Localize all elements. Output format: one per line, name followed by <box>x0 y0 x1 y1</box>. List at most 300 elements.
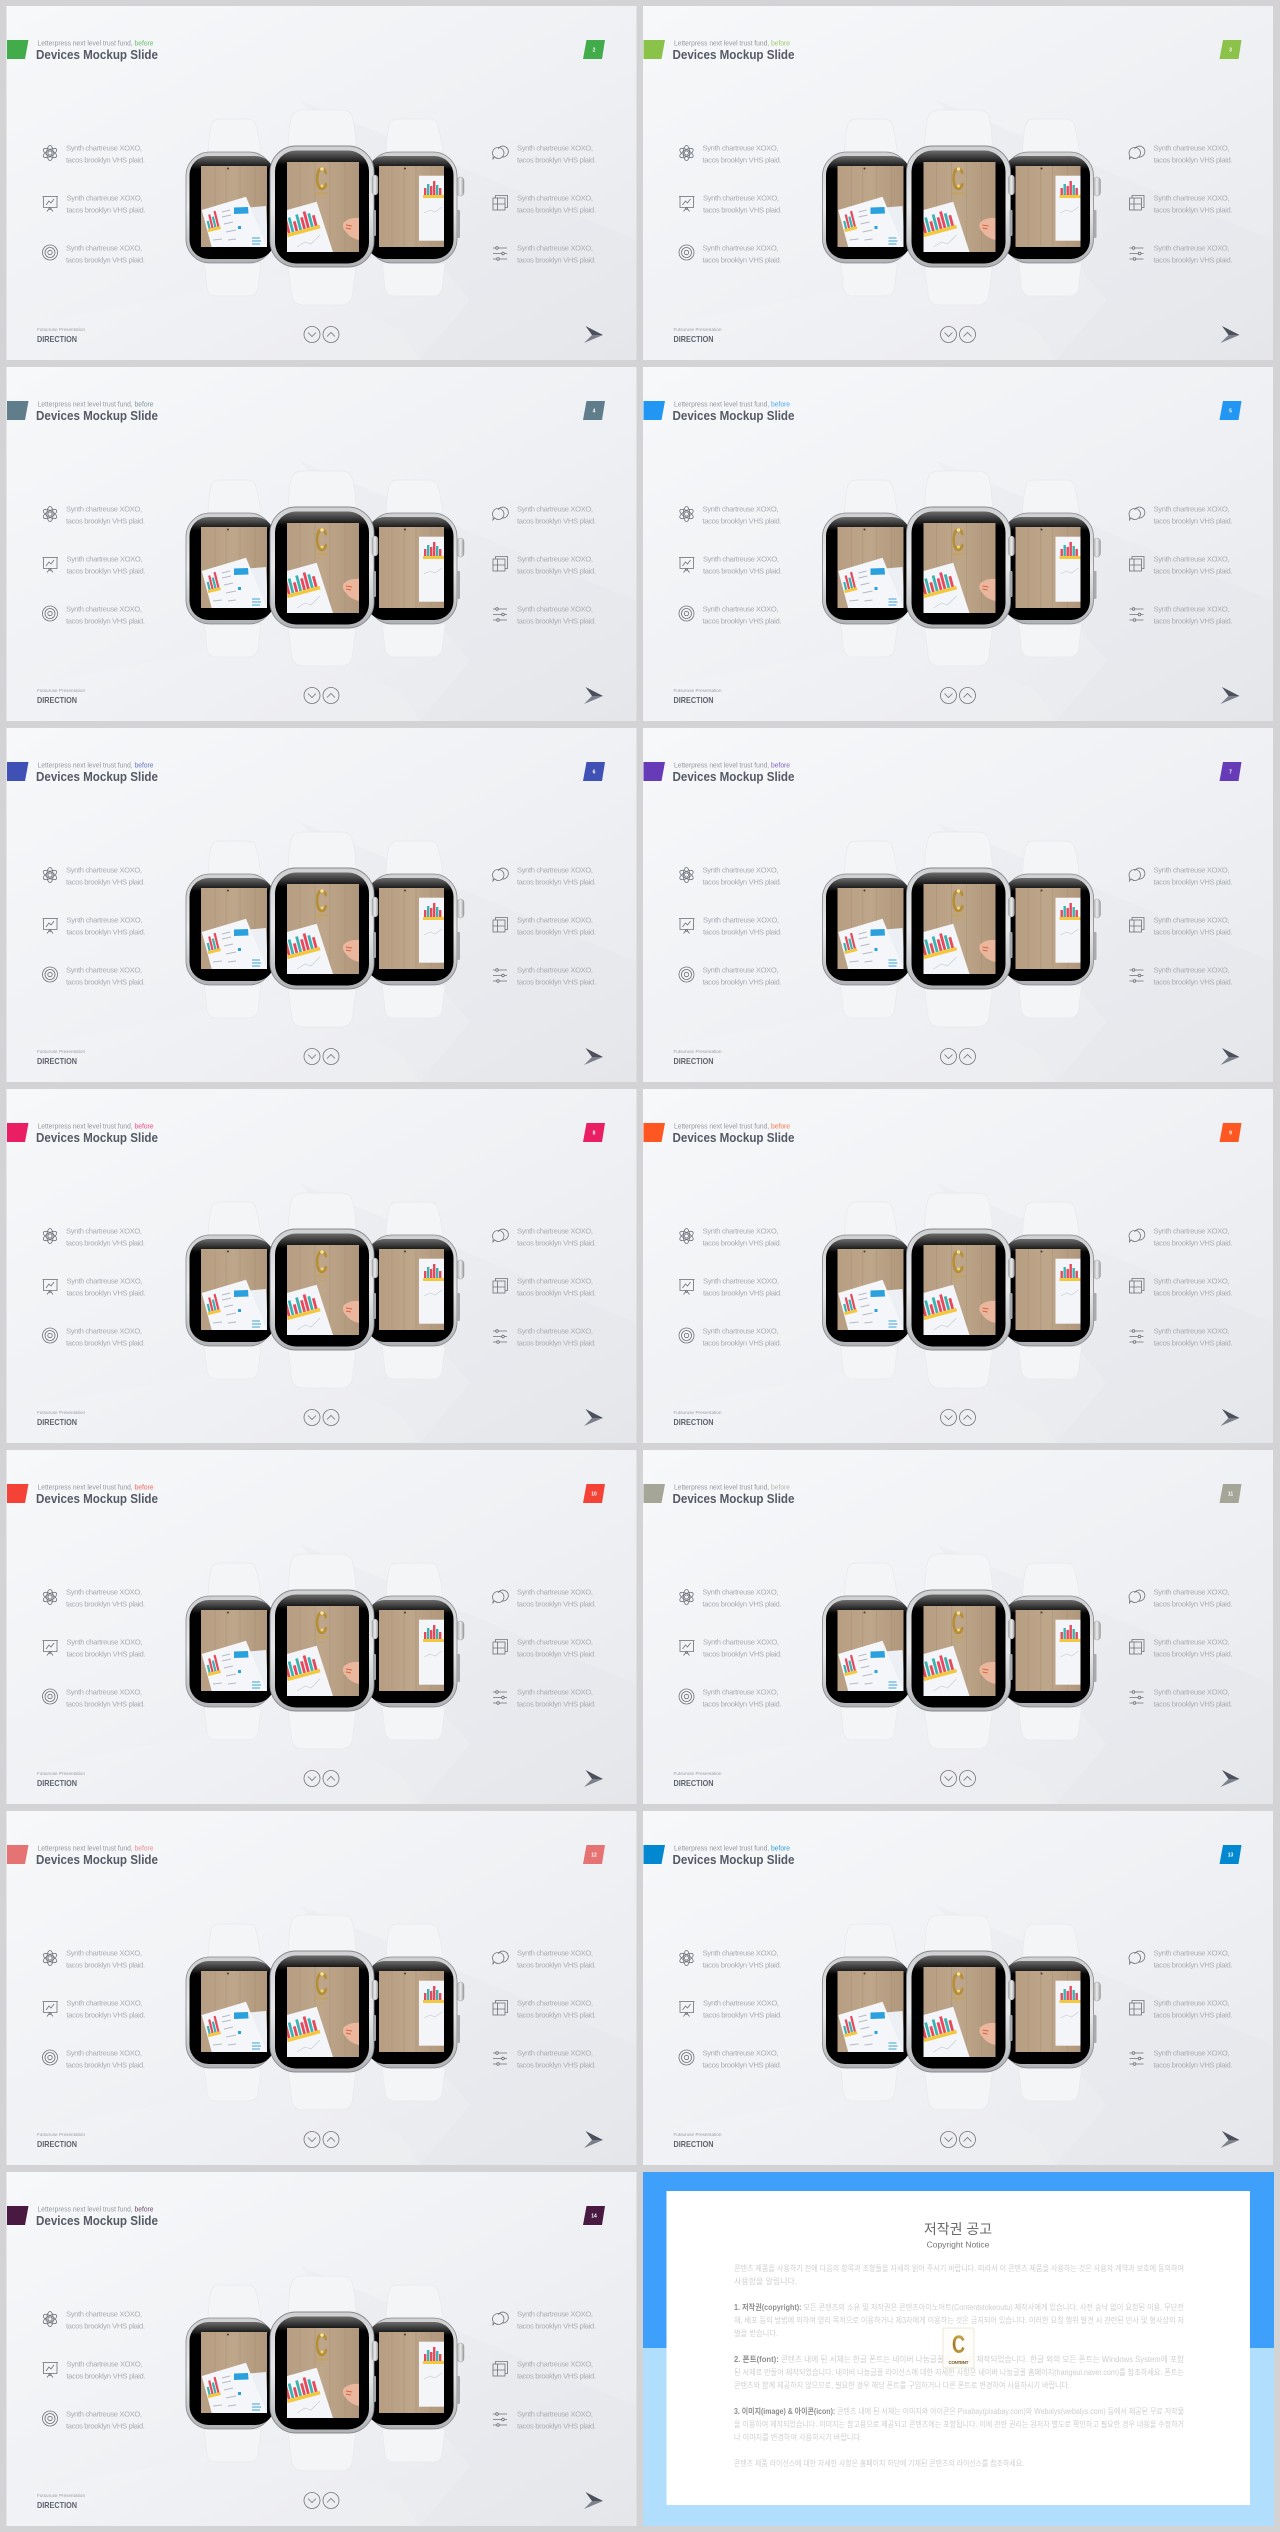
subtitle: Letterpress next level trust fund, before <box>38 400 154 408</box>
device mockup: three watches <box>186 832 464 1027</box>
feature: sliders icon and text <box>1130 2048 1232 2070</box>
footer label: DIRECTION <box>674 1418 714 1427</box>
feature: sliders icon and text: tacos brooklyn VHS plaid. <box>517 256 596 264</box>
page number tag: 3 <box>1229 48 1232 54</box>
footer label <box>37 1049 85 1066</box>
page number tag: 7 <box>1229 770 1232 776</box>
footer label <box>37 2493 85 2510</box>
feature: presentation icon and text: tacos brooklyn VHS plaid. <box>66 206 146 214</box>
feature: presentation icon and text: Synth chartreuse XOXO, <box>66 1998 142 2008</box>
feature: layers icon and text <box>1130 916 1232 936</box>
panel: slide 8 <box>6 1089 636 1443</box>
feature: layers icon and text: tacos brooklyn VHS plaid. <box>517 928 596 936</box>
footer label: DIRECTION <box>37 2501 77 2510</box>
feature: sliders icon and text: Synth chartreuse XOXO, <box>1154 1326 1230 1336</box>
feature: flower icon and text <box>42 504 145 526</box>
feature: presentation icon and text: Synth chartreuse XOXO, <box>703 916 779 924</box>
icon: paper plane <box>1220 326 1240 343</box>
feature: chat icon and text: Synth chartreuse XOXO, <box>517 504 593 514</box>
feature: chat icon and text <box>493 1226 596 1248</box>
page number tag <box>583 1123 605 1142</box>
feature: layers icon and text <box>493 2360 596 2380</box>
footer label: Futsuruse Presentation <box>37 2493 85 2498</box>
feature: flower icon and text: Synth chartreuse XOXO, <box>702 1948 778 1958</box>
feature: flower icon and text: Synth chartreuse XOXO, <box>66 1226 142 1236</box>
feature: flower icon and text: tacos brooklyn VHS plaid. <box>66 878 145 886</box>
color tag: left <box>644 1123 665 1142</box>
feature: target icon and text <box>679 2048 782 2070</box>
icon: paper plane <box>584 1770 603 1787</box>
footer label: Futsuruse Presentation <box>37 1049 85 1054</box>
feature: presentation icon and text <box>679 916 782 936</box>
feature: chat icon and text: tacos brooklyn VHS plaid. <box>1154 878 1232 886</box>
feature: layers icon and text <box>1130 1998 1232 2020</box>
feature: target icon and text: tacos brooklyn VHS plaid. <box>66 2060 145 2070</box>
feature: layers icon and text: tacos brooklyn VHS plaid. <box>1154 1650 1232 1658</box>
footer label: Futsuruse Presentation <box>37 1410 85 1415</box>
feature: target icon and text: Synth chartreuse XOXO, <box>66 2048 142 2058</box>
subtitle: Letterpress next level trust fund, before <box>38 760 154 770</box>
feature: layers icon and text: tacos brooklyn VHS plaid. <box>1154 2010 1232 2020</box>
footer label <box>37 688 85 705</box>
icon: navigation arrows <box>304 1048 339 1064</box>
device mockup: three watches <box>822 1554 1100 1749</box>
feature: sliders icon and text <box>493 966 596 986</box>
footer label <box>37 1410 85 1427</box>
feature: sliders icon and text: tacos brooklyn VHS plaid. <box>517 978 596 986</box>
feature: presentation icon and text: tacos brooklyn VHS plaid. <box>703 2010 782 2020</box>
icon: navigation arrows <box>940 326 976 342</box>
feature: presentation icon and text: Synth chartreuse XOXO, <box>703 1276 779 1286</box>
feature: layers icon and text <box>1130 194 1232 214</box>
panel: slide 6 <box>6 728 636 1082</box>
heading: Devices Mockup Slide <box>672 408 794 423</box>
icon: paper plane <box>584 326 603 343</box>
feature: flower icon and text: tacos brooklyn VHS plaid. <box>66 516 145 526</box>
feature: presentation icon and text: tacos brooklyn VHS plaid. <box>703 928 782 936</box>
feature: flower icon and text <box>42 144 145 164</box>
footer label: Futsuruse Presentation <box>37 1771 85 1776</box>
page number tag <box>1220 401 1242 420</box>
feature: sliders icon and text: Synth chartreuse XOXO, <box>1154 2048 1230 2058</box>
feature: chat icon and text: tacos brooklyn VHS plaid. <box>517 156 596 164</box>
footer label <box>674 688 722 705</box>
feature: presentation icon and text <box>679 194 782 214</box>
feature: sliders icon and text <box>493 2048 596 2070</box>
feature: flower icon and text: Synth chartreuse XOXO, <box>66 144 142 152</box>
page number tag: 13 <box>1228 1852 1233 1858</box>
feature: flower icon and text <box>42 2310 145 2330</box>
footer label <box>37 327 85 344</box>
feature: presentation icon and text: Synth chartreuse XOXO, <box>66 1276 142 1286</box>
feature: flower icon and text <box>678 144 782 164</box>
intro paragraph <box>734 2263 1184 2286</box>
feature: target icon and text <box>42 1688 145 1708</box>
footer label: DIRECTION <box>674 1057 714 1066</box>
footer label: DIRECTION <box>37 335 77 344</box>
footer label: Futsuruse Presentation <box>674 2132 722 2137</box>
page number tag: 4 <box>593 408 596 414</box>
feature: sliders icon and text <box>1130 1688 1232 1708</box>
section: copyright: 재, 배포 등의 방법에 의하여 영리 목적으로 이용하거나 제3자에게 이용하는 것은 금지되어 있습니다. 이러한 요청 행위 발견 시 관련된 민사 및 형사상의 처 <box>734 2315 1184 2325</box>
color tag: left <box>7 2206 28 2225</box>
icon: paper plane <box>584 687 603 704</box>
panel: slide 2 <box>6 6 636 360</box>
feature: layers icon and text <box>493 916 596 936</box>
feature: sliders icon and text <box>1130 604 1232 626</box>
color tag: left <box>644 762 665 781</box>
feature: flower icon and text: tacos brooklyn VHS plaid. <box>66 156 145 164</box>
page number tag: 10 <box>591 1492 597 1498</box>
feature: target icon and text: Synth chartreuse XOXO, <box>702 1326 778 1336</box>
feature: flower icon and text: Synth chartreuse XOXO, <box>702 1226 778 1236</box>
section: font: 된 서체로 만들어 제작되었습니다. 네이버 나눔글꼴 라이선스에 대한 자세한 사항은 네이버 나눔글꼴 홈페이지(hangeul.naver.com)를 참조하세요. 폰트는 <box>734 2367 1184 2377</box>
feature: sliders icon and text: tacos brooklyn VHS plaid. <box>1154 256 1232 264</box>
page number tag: 14 <box>591 2214 597 2220</box>
panel: slide 12 <box>6 1811 636 2165</box>
feature: sliders icon and text: tacos brooklyn VHS plaid. <box>1154 616 1232 626</box>
feature: sliders icon and text <box>1130 1326 1232 1348</box>
icon: paper plane <box>1220 2131 1240 2148</box>
feature: sliders icon and text <box>493 1326 596 1348</box>
closing line: 콘텐츠 제품 라이선스에 대한 자세한 사항은 홈페이지 하단에 기재된 콘텐츠의 라이선스를 참조하세요. <box>734 2458 1024 2468</box>
feature: flower icon and text <box>42 1588 145 1608</box>
feature: chat icon and text: Synth chartreuse XOXO, <box>517 144 593 152</box>
section: image and icon: 을 이용하여 제작되었습니다. 이미지는 참고용으로 제공되고 콘텐츠에는 포함됩니다. 이에 관한 권리는 원저자 별도로 확인하고 필요한 경우 내용을 수정하거 <box>734 2419 1184 2429</box>
device mockup: three watches <box>186 1554 464 1749</box>
icon: paper plane <box>1220 687 1240 704</box>
feature: chat icon and text <box>493 1948 596 1970</box>
subtitle: Letterpress next level trust fund, before <box>674 38 790 48</box>
feature: chat icon and text <box>493 1588 596 1608</box>
feature: presentation icon and text: tacos brooklyn VHS plaid. <box>66 928 146 936</box>
feature: target icon and text: Synth chartreuse XOXO, <box>702 244 778 252</box>
feature: chat icon and text <box>493 2310 596 2330</box>
feature: sliders icon and text: Synth chartreuse XOXO, <box>1154 604 1230 614</box>
feature: chat icon and text: tacos brooklyn VHS plaid. <box>517 878 596 886</box>
panel: slide 13 <box>643 1811 1273 2165</box>
color tag: left <box>7 40 28 59</box>
icon: paper plane <box>1220 1409 1240 1426</box>
subtitle: Letterpress next level trust fund, before <box>674 1482 790 1492</box>
feature: flower icon and text <box>42 1948 145 1970</box>
device mockup: three watches <box>186 2276 464 2471</box>
page number tag: 2 <box>593 48 596 54</box>
color tag: left <box>644 1845 665 1864</box>
heading: Devices Mockup Slide <box>672 1491 794 1506</box>
feature: chat icon and text: Synth chartreuse XOXO, <box>1154 1226 1230 1236</box>
feature: presentation icon and text <box>42 554 146 576</box>
feature: target icon and text <box>679 966 782 986</box>
heading: Devices Mockup Slide <box>36 47 158 62</box>
feature: layers icon and text: tacos brooklyn VHS plaid. <box>517 566 596 576</box>
icon: navigation arrows <box>304 1410 339 1426</box>
device mockup: three watches <box>822 110 1100 305</box>
feature: chat icon and text: tacos brooklyn VHS plaid. <box>1154 1960 1232 1970</box>
footer label: Futsuruse Presentation <box>674 327 722 332</box>
feature: target icon and text: Synth chartreuse XOXO, <box>66 1326 142 1336</box>
feature: presentation icon and text: tacos brooklyn VHS plaid. <box>703 1288 782 1298</box>
feature: flower icon and text: tacos brooklyn VHS plaid. <box>66 2322 145 2330</box>
device mockup: three watches <box>822 1193 1100 1388</box>
feature: target icon and text <box>679 1688 782 1708</box>
feature: presentation icon and text: tacos brooklyn VHS plaid. <box>703 566 782 576</box>
feature: layers icon and text: tacos brooklyn VHS plaid. <box>517 206 596 214</box>
feature: target icon and text: Synth chartreuse XOXO, <box>66 604 142 614</box>
feature: layers icon and text: tacos brooklyn VHS plaid. <box>517 1650 596 1658</box>
footer label: DIRECTION <box>674 335 714 344</box>
feature: presentation icon and text: Synth chartreuse XOXO, <box>66 554 142 564</box>
section: font: 2. 폰트(font): 콘텐츠 내에 된 서체는 한글 폰트는 네이버 나눔글꼴의 서체로 제작되었습니다. 한글 외의 모든 폰트는 Windows System에 포함 <box>734 2354 1185 2364</box>
color tag: left <box>644 401 665 420</box>
feature: target icon and text: tacos brooklyn VHS plaid. <box>702 978 782 986</box>
feature: presentation icon and text <box>42 194 146 214</box>
feature: presentation icon and text: tacos brooklyn VHS plaid. <box>66 1650 146 1658</box>
intro paragraph: 콘텐츠 제품을 사용하기 전에 다음의 항목과 조항들을 자세히 읽어 주시기 바랍니다. 따라서 이 콘텐츠 제품을 사용하는 것은 사용자 계약과 보호에 동의하여 <box>734 2263 1184 2273</box>
heading: Devices Mockup Slide <box>672 47 794 62</box>
feature: layers icon and text: Synth chartreuse XOXO, <box>517 916 593 924</box>
page number tag: 8 <box>593 1130 596 1136</box>
feature: target icon and text: tacos brooklyn VHS plaid. <box>702 1338 782 1348</box>
notice card <box>666 2191 1250 2505</box>
feature: layers icon and text <box>1130 1638 1232 1658</box>
feature: target icon and text: tacos brooklyn VHS plaid. <box>702 1700 782 1708</box>
icon: navigation arrows <box>940 688 976 704</box>
feature: sliders icon and text: tacos brooklyn VHS plaid. <box>517 1338 596 1348</box>
icon: paper plane <box>584 2131 603 2148</box>
feature: flower icon and text: Synth chartreuse XOXO, <box>702 504 778 514</box>
subtitle: Letterpress next level trust fund, before <box>38 38 154 48</box>
feature: target icon and text <box>679 244 782 264</box>
icon: navigation arrows <box>304 2132 339 2148</box>
page number tag <box>1220 1845 1242 1864</box>
feature: chat icon and text: tacos brooklyn VHS plaid. <box>517 1238 596 1248</box>
panel: slide 5 <box>643 367 1273 721</box>
feature: target icon and text: Synth chartreuse XOXO, <box>702 1688 778 1696</box>
device mockup: three watches <box>822 471 1100 666</box>
color tag: left <box>7 1123 28 1142</box>
panel: slide 7 <box>643 728 1273 1082</box>
feature: presentation icon and text: Synth chartreuse XOXO, <box>66 2360 142 2368</box>
feature: layers icon and text: Synth chartreuse XOXO, <box>517 194 593 202</box>
feature: presentation icon and text: Synth chartreuse XOXO, <box>703 1638 779 1646</box>
page number tag <box>583 1845 605 1864</box>
footer label: DIRECTION <box>674 2140 714 2149</box>
panel: slide 4 <box>6 367 636 721</box>
panel: slide 9 <box>643 1089 1273 1443</box>
feature: presentation icon and text: tacos brooklyn VHS plaid. <box>66 566 146 576</box>
color tag: left <box>7 762 28 781</box>
feature: target icon and text: Synth chartreuse XOXO, <box>66 966 142 974</box>
feature: flower icon and text: Synth chartreuse XOXO, <box>66 1948 142 1958</box>
heading: Devices Mockup Slide <box>36 2213 158 2228</box>
device mockup: three watches <box>822 1915 1100 2110</box>
footer label: Futsuruse Presentation <box>674 1049 722 1054</box>
feature: chat icon and text: Synth chartreuse XOXO, <box>517 2310 593 2318</box>
feature: layers icon and text: Synth chartreuse XOXO, <box>1154 1638 1230 1646</box>
feature: target icon and text: tacos brooklyn VHS plaid. <box>66 2422 145 2430</box>
feature: presentation icon and text <box>42 2360 146 2380</box>
feature: sliders icon and text: Synth chartreuse XOXO, <box>517 244 593 252</box>
feature: sliders icon and text: tacos brooklyn VHS plaid. <box>517 2422 596 2430</box>
feature: sliders icon and text <box>493 1688 596 1708</box>
icon: navigation arrows <box>304 1770 339 1786</box>
footer label: DIRECTION <box>37 1418 77 1427</box>
panel: slide 10 <box>6 1450 636 1804</box>
footer label: Futsuruse Presentation <box>37 327 85 332</box>
feature: chat icon and text: Synth chartreuse XOXO, <box>517 1588 593 1596</box>
panel: slide 3 <box>643 6 1273 360</box>
page number tag: 11 <box>1228 1492 1233 1498</box>
footer label: DIRECTION <box>37 696 77 705</box>
feature: chat icon and text: Synth chartreuse XOXO, <box>1154 1948 1230 1958</box>
footer label: Futsuruse Presentation <box>674 1771 722 1776</box>
feature: target icon and text: Synth chartreuse XOXO, <box>702 966 778 974</box>
page number tag: 12 <box>591 1852 597 1858</box>
notice subtitle: Copyright Notice <box>927 2240 990 2250</box>
feature: presentation icon and text <box>679 554 782 576</box>
color tag: left <box>644 1484 665 1503</box>
feature: flower icon and text: Synth chartreuse XOXO, <box>702 866 778 874</box>
feature: chat icon and text: Synth chartreuse XOXO, <box>517 1948 593 1958</box>
icon: paper plane <box>1220 1048 1240 1065</box>
page number tag <box>1220 762 1242 781</box>
feature: chat icon and text: tacos brooklyn VHS plaid. <box>517 2322 596 2330</box>
feature: chat icon and text <box>1129 1226 1232 1248</box>
feature: flower icon and text: tacos brooklyn VHS plaid. <box>702 878 782 886</box>
panel: copyright notice <box>643 2172 1274 2526</box>
heading: Devices Mockup Slide <box>36 1491 158 1506</box>
device mockup: three watches <box>186 110 464 305</box>
feature: presentation icon and text: Synth chartreuse XOXO, <box>66 916 142 924</box>
feature: flower icon and text: Synth chartreuse XOXO, <box>66 2310 142 2318</box>
heading: Devices Mockup Slide <box>672 769 794 784</box>
feature: target icon and text: tacos brooklyn VHS plaid. <box>66 1338 145 1348</box>
section: image and icon <box>734 2406 1184 2442</box>
feature: flower icon and text <box>678 1588 782 1608</box>
page number tag: 6 <box>593 770 596 776</box>
page number tag <box>1220 1484 1242 1503</box>
feature: presentation icon and text <box>42 1998 146 2020</box>
feature: chat icon and text: Synth chartreuse XOXO, <box>1154 144 1230 152</box>
subtitle: Letterpress next level trust fund, before <box>38 1482 154 1492</box>
feature: layers icon and text <box>1130 1276 1232 1298</box>
feature: presentation icon and text: tacos brooklyn VHS plaid. <box>66 2010 146 2020</box>
feature: layers icon and text: Synth chartreuse XOXO, <box>1154 554 1230 564</box>
footer label <box>674 2132 722 2149</box>
feature: sliders icon and text: tacos brooklyn VHS plaid. <box>1154 1700 1232 1708</box>
feature: sliders icon and text: Synth chartreuse XOXO, <box>517 2048 593 2058</box>
feature: sliders icon and text <box>1130 244 1232 264</box>
notice title: 저작권 공고 <box>924 2221 992 2237</box>
feature: chat icon and text: Synth chartreuse XOXO, <box>1154 504 1230 514</box>
feature: target icon and text: Synth chartreuse XOXO, <box>702 604 778 614</box>
feature: flower icon and text <box>678 1226 782 1248</box>
icon: paper plane <box>1220 1770 1240 1787</box>
feature: target icon and text: Synth chartreuse XOXO, <box>66 244 142 252</box>
feature: sliders icon and text: tacos brooklyn VHS plaid. <box>517 1700 596 1708</box>
device mockup: three watches <box>822 832 1100 1027</box>
feature: chat icon and text <box>493 504 596 526</box>
page number tag <box>583 401 605 420</box>
feature: sliders icon and text: Synth chartreuse XOXO, <box>1154 1688 1230 1696</box>
feature: chat icon and text <box>1129 1948 1232 1970</box>
feature: chat icon and text <box>493 144 596 164</box>
feature: presentation icon and text <box>679 1638 782 1658</box>
feature: layers icon and text: tacos brooklyn VHS plaid. <box>517 2372 596 2380</box>
feature: chat icon and text: Synth chartreuse XOXO, <box>517 1226 593 1236</box>
heading: Devices Mockup Slide <box>36 1852 158 1867</box>
feature: layers icon and text: Synth chartreuse XOXO, <box>1154 194 1230 202</box>
feature: flower icon and text <box>678 504 782 526</box>
footer label: DIRECTION <box>674 1779 714 1788</box>
feature: chat icon and text <box>1129 144 1232 164</box>
feature: layers icon and text: Synth chartreuse XOXO, <box>517 1276 593 1286</box>
feature: flower icon and text: tacos brooklyn VHS plaid. <box>66 1600 145 1608</box>
subtitle: Letterpress next level trust fund, before <box>674 1844 790 1852</box>
feature: presentation icon and text <box>679 1998 782 2020</box>
feature: chat icon and text: tacos brooklyn VHS plaid. <box>517 516 596 526</box>
feature: target icon and text: tacos brooklyn VHS plaid. <box>702 616 782 626</box>
icon: navigation arrows <box>940 2132 976 2148</box>
panel: slide 11 <box>643 1450 1273 1804</box>
section: font: 콘텐츠와 함께 제공하지 않으므로, 필요한 경우 해당 폰트를 구입하거나 다른 폰트로 변경하여 사용하시기 바랍니다. <box>734 2380 1070 2390</box>
feature: presentation icon and text: Synth chartreuse XOXO, <box>703 554 779 564</box>
icon: navigation arrows <box>304 2492 339 2508</box>
feature: layers icon and text: tacos brooklyn VHS plaid. <box>1154 566 1232 576</box>
feature: chat icon and text: Synth chartreuse XOXO, <box>1154 1588 1230 1596</box>
page number tag: 9 <box>1229 1130 1232 1136</box>
feature: target icon and text <box>42 1326 145 1348</box>
feature: target icon and text <box>42 244 145 264</box>
feature: sliders icon and text: Synth chartreuse XOXO, <box>517 2410 593 2418</box>
section: copyright: 1. 저작권(copyright): 모든 콘텐츠의 소유 및 저작권은 콘텐츠아이노어트(Contentstokeoutu) 제작사에게 있습니다. 사전 승낙 없이 요청된 이용, 무단전 <box>734 2302 1184 2312</box>
heading: Devices Mockup Slide <box>36 769 158 784</box>
footer label <box>674 1049 722 1066</box>
feature: flower icon and text <box>42 1226 145 1248</box>
feature: chat icon and text: Synth chartreuse XOXO, <box>1154 866 1230 874</box>
feature: sliders icon and text: tacos brooklyn VHS plaid. <box>1154 2060 1232 2070</box>
feature: chat icon and text: tacos brooklyn VHS plaid. <box>517 1960 596 1970</box>
feature: target icon and text <box>42 2410 145 2430</box>
feature: target icon and text <box>679 1326 782 1348</box>
subtitle: Letterpress next level trust fund, before <box>38 1122 154 1130</box>
feature: layers icon and text: tacos brooklyn VHS plaid. <box>1154 206 1232 214</box>
icon: navigation arrows <box>940 1048 976 1064</box>
feature: sliders icon and text: tacos brooklyn VHS plaid. <box>1154 1338 1232 1348</box>
footer label: DIRECTION <box>674 696 714 705</box>
feature: layers icon and text <box>493 1638 596 1658</box>
feature: flower icon and text: Synth chartreuse XOXO, <box>66 504 142 514</box>
feature: target icon and text: tacos brooklyn VHS plaid. <box>66 256 145 264</box>
logo badge: C <box>952 2330 965 2359</box>
feature: flower icon and text: tacos brooklyn VHS plaid. <box>66 1238 145 1248</box>
feature: sliders icon and text <box>493 2410 596 2430</box>
section: copyright: 벌을 받습니다. <box>734 2328 778 2338</box>
feature: presentation icon and text: Synth chartreuse XOXO, <box>66 194 142 202</box>
footer label <box>674 1771 722 1788</box>
feature: target icon and text <box>679 604 782 626</box>
footer label: Futsuruse Presentation <box>674 688 722 693</box>
feature: target icon and text: Synth chartreuse XOXO, <box>66 1688 142 1696</box>
feature: layers icon and text: Synth chartreuse XOXO, <box>1154 1998 1230 2008</box>
feature: presentation icon and text: tacos brooklyn VHS plaid. <box>703 1650 782 1658</box>
feature: sliders icon and text: tacos brooklyn VHS plaid. <box>1154 978 1232 986</box>
feature: presentation icon and text: tacos brooklyn VHS plaid. <box>66 1288 146 1298</box>
page number tag: 5 <box>1229 408 1232 414</box>
feature: flower icon and text: tacos brooklyn VHS plaid. <box>702 1960 782 1970</box>
feature: sliders icon and text: Synth chartreuse XOXO, <box>517 1688 593 1696</box>
